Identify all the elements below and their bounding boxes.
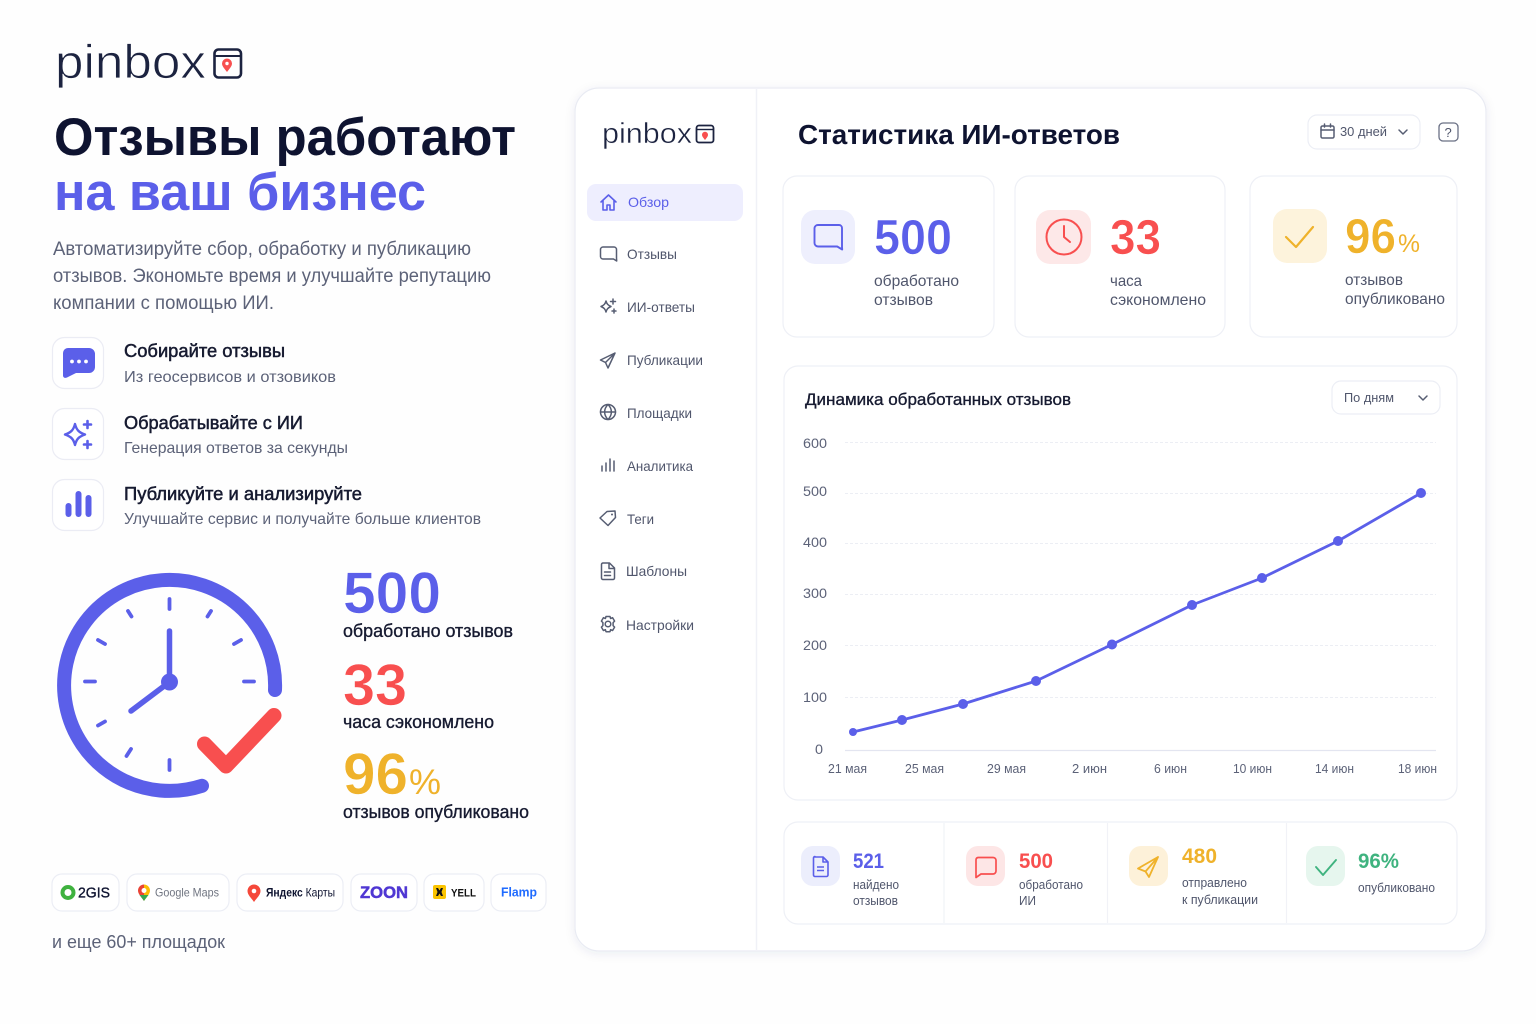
help button: ?: [1444, 125, 1452, 140]
feature: collect reviews: [52, 338, 336, 388]
key stat: 500 processed: 500: [343, 561, 441, 626]
feature: publish and analyse: [52, 480, 481, 530]
platform chip: YELL: [424, 874, 484, 911]
nav item: reviews: Отзывы: [627, 246, 677, 262]
nav item: tags: [600, 511, 654, 527]
metric: processed by AI: ИИ: [1019, 893, 1036, 908]
line chart: 29 мая: [987, 761, 1026, 776]
line chart: 2 июн: [1072, 761, 1107, 776]
stat card: processed reviews: [783, 176, 994, 337]
metric: found reviews: найдено: [853, 877, 899, 892]
line chart: 18 июн: [1398, 761, 1437, 776]
nav item: overview (active): Обзор: [628, 194, 669, 210]
nav item: publications: Публикации: [627, 352, 703, 368]
metric: published: [1306, 846, 1435, 895]
dashboard title: Статистика ИИ-ответов: [798, 119, 1120, 150]
dashboard logo: pinbox: [602, 118, 692, 150]
nav item: templates: [602, 563, 687, 580]
help button: [1439, 123, 1458, 141]
metric: sent for publication: 480: [1182, 845, 1217, 868]
stat card: processed reviews: обработано: [874, 273, 959, 290]
chart title: Динамика обработанных отзывов: [805, 390, 1071, 409]
stat card: published: 96: [1345, 210, 1396, 264]
intro paragraph: компании с помощью ИИ.: [53, 293, 274, 314]
line chart: 0: [815, 741, 823, 757]
panel: dashboard: [575, 88, 1486, 951]
nav item: templates: Шаблоны: [626, 563, 687, 579]
line chart: 200: [803, 637, 827, 653]
stat card: hours saved: 33: [1110, 211, 1161, 265]
nav item: analytics: Аналитика: [627, 458, 693, 474]
chart card: reviews dynamics: [784, 366, 1457, 800]
platform chip: ZOON: [351, 874, 417, 911]
line chart: 400: [803, 534, 827, 550]
stat card: hours saved: часа: [1110, 273, 1142, 290]
platform chip: ZOON: ZOON: [360, 883, 408, 902]
metric: processed by AI: [966, 846, 1083, 908]
nav item: AI replies: ИИ-ответы: [627, 299, 695, 315]
line chart: 6 июн: [1154, 761, 1187, 776]
line chart: 10 июн: [1233, 761, 1272, 776]
platform chip: YELL: YELL: [451, 888, 476, 900]
line chart: [803, 435, 1437, 776]
chart granularity dropdown: [1332, 381, 1440, 414]
platform chip: Flamp: [491, 874, 546, 911]
feature: process with AI: [52, 408, 348, 460]
platform chip: Flamp: Flamp: [501, 884, 537, 900]
stat card: processed reviews: отзывов: [874, 292, 933, 309]
line chart: 300: [803, 585, 827, 601]
line chart: 14 июн: [1315, 761, 1354, 776]
metric: found reviews: [801, 846, 899, 908]
key stat: 96% published: [343, 742, 529, 822]
line chart: 25 мая: [905, 761, 944, 776]
nav item: overview (active): [587, 184, 743, 221]
key stat: 500 processed: обработано отзывов: [343, 621, 513, 641]
headline: Отзывы работают: [54, 108, 516, 167]
line chart: 500: [803, 483, 827, 499]
period dropdown: 30 дней: [1340, 124, 1387, 139]
nav item: platforms: [600, 404, 692, 421]
nav item: tags: Теги: [627, 511, 654, 527]
metric: processed by AI: обработано: [1019, 877, 1083, 892]
key stat: 33 hours saved: [343, 653, 494, 732]
stat card: published: отзывов: [1345, 272, 1403, 289]
intro paragraph: [53, 239, 491, 314]
metric: published: 96%: [1358, 850, 1399, 873]
key stat: 33 hours saved: часа сэкономлено: [343, 712, 494, 732]
metric: found reviews: отзывов: [853, 893, 898, 908]
nav item: reviews: [600, 246, 677, 262]
chart granularity dropdown: По дням: [1344, 390, 1394, 405]
icon: clock with check mark: [64, 580, 275, 791]
line chart: 100: [803, 689, 827, 705]
period dropdown: [1308, 115, 1420, 149]
nav item: settings: Настройки: [626, 617, 694, 633]
stat card: published: %: [1398, 230, 1420, 258]
stat card: hours saved: сэкономлено: [1110, 292, 1206, 309]
metric: sent for publication: к публикации: [1182, 892, 1258, 907]
stat card: hours saved: [1015, 176, 1225, 337]
metric: published: опубликовано: [1358, 880, 1435, 895]
feature: collect reviews: Собирайте отзывы: [124, 341, 285, 361]
more platforms note: и еще 60+ площадок: [52, 932, 225, 952]
metric: processed by AI: 500: [1019, 850, 1053, 873]
metric: sent for publication: отправлено: [1182, 875, 1247, 890]
stat card: processed reviews: 500: [874, 211, 952, 265]
platform chip: Yandex Maps: Яндекс Карты: [266, 886, 335, 900]
key stat: 96% published: %: [409, 763, 441, 802]
feature: collect reviews: Из геосервисов и отзовиков: [124, 369, 336, 386]
line chart: 21 мая: [828, 761, 867, 776]
metric: sent for publication: [1129, 845, 1258, 907]
bottom metrics strip: [784, 822, 1457, 924]
feature: process with AI: Генерация ответов за секунды: [124, 440, 348, 457]
headline: на ваш бизнес: [54, 163, 426, 222]
logo: pinbox: pinbox: [55, 35, 206, 88]
platform chip: 2GIS: [52, 874, 119, 911]
line chart: 600: [803, 435, 827, 451]
key stat: 33 hours saved: 33: [343, 653, 407, 718]
headline: [54, 108, 516, 222]
platform chip: Google Maps: Google Maps: [155, 886, 219, 900]
stat card: published: [1250, 176, 1457, 337]
nav item: platforms: Площадки: [627, 405, 692, 421]
key stat: 500 processed: [343, 561, 513, 641]
feature: publish and analyse: Улучшайте сервис и получайте больше клиентов: [124, 511, 481, 528]
key stat: 96% published: 96: [343, 742, 408, 807]
platform chip: Google Maps: [127, 874, 229, 911]
feature: process with AI: Обрабатывайте с ИИ: [124, 413, 303, 433]
platform chip: Yandex Maps: [237, 874, 343, 911]
feature: publish and analyse: Публикуйте и анализируйте: [124, 484, 362, 504]
intro paragraph: Автоматизируйте сбор, обработку и публикацию: [53, 239, 471, 260]
key stat: 96% published: отзывов опубликовано: [343, 802, 529, 822]
metric: found reviews: 521: [853, 850, 884, 873]
platform chip: 2GIS: 2GIS: [78, 884, 110, 902]
intro paragraph: отзывов. Экономьте время и улучшайте репутацию: [53, 266, 491, 287]
stat card: published: опубликовано: [1345, 291, 1445, 308]
